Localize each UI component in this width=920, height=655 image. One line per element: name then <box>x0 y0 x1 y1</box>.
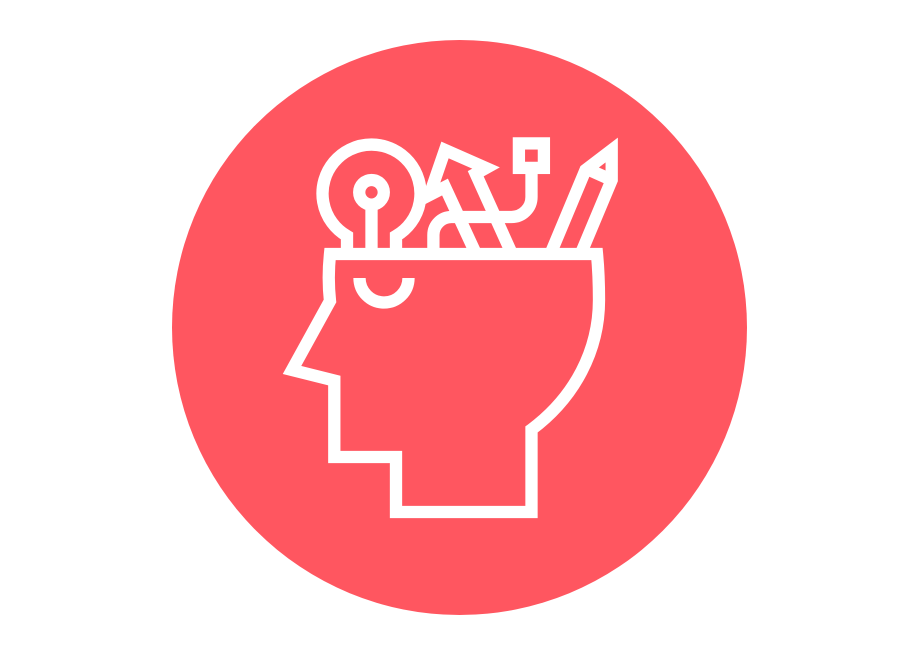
icon: pencil <box>550 150 612 254</box>
bulb filament ring <box>359 180 384 205</box>
icon: head with ideas <box>292 143 612 512</box>
icon: light bulb <box>323 145 420 254</box>
icon: circuit wire with square node <box>433 143 544 254</box>
red circle background <box>172 40 747 615</box>
bulb filament stem <box>365 205 378 254</box>
pencil band <box>586 168 612 180</box>
bulb glass <box>323 145 420 254</box>
wire <box>433 168 532 254</box>
icon: arrow <box>430 150 512 254</box>
head outline <box>292 254 599 512</box>
square node <box>519 143 544 168</box>
pencil body <box>550 150 612 254</box>
closed eye <box>360 278 408 302</box>
